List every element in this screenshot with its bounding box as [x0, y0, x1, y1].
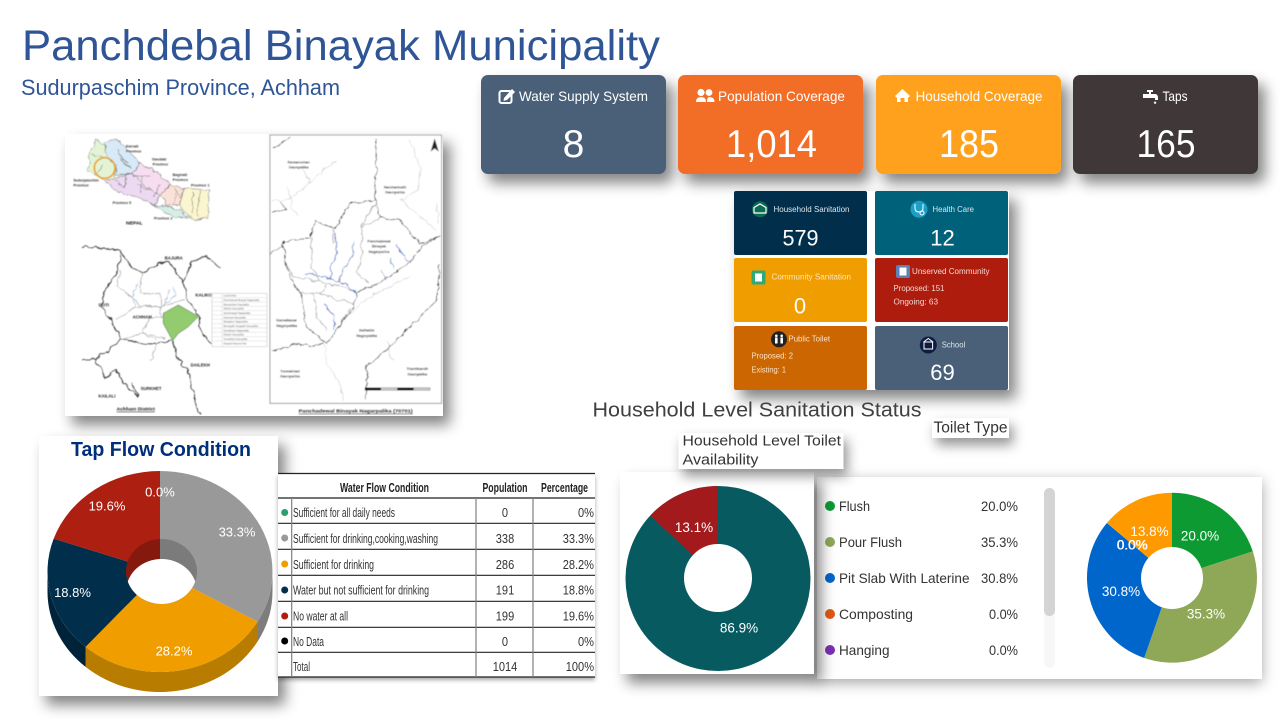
panel: location maps: Panchadewal Binayak Nagarpalika (70701) [299, 409, 413, 415]
chart: toilet type donut: 0.0% [1117, 538, 1147, 552]
panel: location maps: ACHHAM [133, 315, 152, 320]
icon: north arrow [431, 138, 439, 152]
panel: location maps: Thantikandh [406, 367, 428, 371]
icon: school [920, 336, 937, 354]
table: water flow condition: Population [482, 480, 528, 495]
legend: toilet types: 35.3% [981, 534, 1018, 550]
legend: toilet types: 30.8% [981, 570, 1018, 586]
panel: location maps: Province 5 [113, 201, 131, 205]
KPI card: population coverage [678, 75, 863, 174]
table: water flow condition: 28.2% [563, 557, 594, 572]
KPI card: population coverage: Population Coverage [718, 88, 845, 104]
panel: location maps: BAJURA [165, 255, 184, 260]
card: health care: 12 [930, 226, 955, 250]
panel: location maps: Karnali [126, 145, 138, 149]
table: water flow condition: 191 [496, 583, 514, 598]
panel: location maps: Province [73, 184, 89, 188]
legend: local bodies table: Local bodies [223, 296, 237, 298]
legend: local bodies table: Ramaroshan Gaunpalika [223, 303, 250, 306]
panel: location maps [65, 134, 443, 416]
panel: location maps: Nagarpalika [356, 334, 378, 338]
table: water flow condition: 33.3% [563, 531, 594, 546]
table: water flow condition: Total [293, 659, 310, 674]
chart: toilet type donut: 0.0% [1117, 538, 1148, 552]
table: water flow condition: Sufficient for drinking [293, 557, 374, 572]
chart: availability donut: 13.1% [675, 520, 713, 535]
chart: availability donut [626, 486, 810, 671]
legend: local bodies table: Kamalbazar Nagarpalika [223, 329, 250, 332]
map: municipality detail [270, 135, 442, 403]
KPI card: water supply system [481, 75, 666, 174]
legend: local bodies table: Khaptad National Park [223, 342, 247, 345]
card: unserved community: Ongoing: 63 [894, 298, 939, 307]
table: water flow condition: 0 [502, 634, 508, 649]
icon: clipboard [896, 265, 910, 278]
heading: tap flow condition: Tap Flow Condition [71, 439, 251, 461]
panel: location maps: NEPAL [126, 220, 143, 226]
table: water flow condition: No water at all [293, 608, 348, 624]
legend: toilet types: Flush [839, 498, 870, 514]
table: water flow condition: 286 [496, 557, 514, 572]
KPI card: water supply system: Water Supply System [519, 88, 648, 104]
card: school: School [942, 340, 965, 349]
table: water flow condition: 338 [496, 531, 514, 546]
legend dots [281, 509, 288, 644]
card: school [875, 326, 1008, 390]
panel: location maps: DOTI [99, 302, 109, 307]
icon: edit [500, 89, 515, 103]
panel: location maps: Province [173, 178, 188, 182]
panel: location maps: Province 1 [191, 184, 209, 188]
map: Nepal provinces [88, 140, 208, 219]
title: Panchdebal Binayak Municipality [22, 22, 660, 70]
subtitle: Sudurpaschim Province, Achham [21, 75, 340, 100]
panel: location maps: Narsharinath [384, 185, 406, 189]
legend: toilet types: 0.0% [989, 642, 1018, 658]
card: household sanitation: Household Sanitation [774, 205, 850, 214]
legend: local bodies table: Dhakari Gaunpalika [223, 334, 244, 337]
chart: 3D donut: 0.0% [145, 484, 175, 500]
legend: toilet types: 0.0% [989, 606, 1018, 622]
icon: faucet [1143, 90, 1158, 104]
table: water flow condition: 18.8% [563, 583, 594, 598]
legend: local bodies table: Sanphebagar Nagarpalika [223, 312, 251, 315]
card: public toilet: Proposed: 2 [752, 352, 794, 361]
card: community sanitation [734, 258, 867, 322]
KPI card: water supply system: 8 [563, 123, 584, 166]
KPI card: household coverage: Household Coverage [916, 88, 1043, 104]
chart: toilet type donut: 30.8% [1102, 584, 1140, 599]
panel: location maps: Binayak [372, 245, 387, 249]
table: water flow condition [278, 473, 595, 677]
card: health care [875, 191, 1008, 255]
KPI card: taps: Taps [1162, 88, 1188, 104]
chart: toilet type donut: 13.8% [1130, 524, 1169, 539]
panel: location maps: Province [153, 162, 168, 166]
card: unserved community: Proposed: 151 [894, 284, 945, 293]
legend: local bodies table: Panchadewal Binayak Nagarpalika [223, 299, 260, 302]
panel: location maps: Province [126, 149, 141, 153]
panel: location maps: Panchadewal [367, 239, 391, 243]
icon: stethoscope [910, 201, 928, 218]
table: water flow condition: 1014 [493, 659, 518, 674]
panel: location maps: DAILEKH [191, 363, 210, 368]
scale bar [365, 388, 430, 390]
panel: location maps: Nagarpalika [369, 250, 390, 254]
legend: local bodies table: Turmakhad Gaunpalika [223, 338, 248, 341]
panel: location maps: KALIKO [195, 293, 213, 298]
KPI card: taps [1073, 75, 1258, 174]
chart: 3D donut: 33.3% [219, 524, 256, 540]
legend: local bodies table: Chaurpati Gaunpalika [223, 316, 247, 319]
label: household level toilet availability: Availability [682, 451, 759, 468]
panel: location maps: Province 2 [154, 217, 172, 221]
icon: users [696, 89, 714, 102]
panel: household toilet availability [620, 472, 814, 674]
chart: 3D donut: 19.6% [89, 498, 126, 514]
panel: location maps: Gaunpalika [280, 375, 301, 379]
chart: 3D donut [47, 471, 272, 692]
legend: toilet types: Hanging [839, 642, 890, 658]
chart: toilet type donut: 20.0% [1181, 528, 1219, 544]
heading: household level sanitation status: Household Level Sanitation Status [592, 400, 922, 422]
KPI card: population coverage: 1,014 [726, 123, 817, 166]
table: water flow condition: Sufficient for drinking,cooking,washing [293, 531, 438, 546]
label: household level toilet availability [678, 433, 844, 469]
panel: location maps: KAILALI [98, 393, 115, 398]
card: school: 69 [930, 360, 955, 385]
scrollbar [1044, 488, 1055, 668]
card: household sanitation: 579 [782, 226, 818, 250]
panel: location maps: Turmakhad [280, 369, 300, 373]
panel: location maps: Sudurpaschim [73, 179, 99, 183]
legend: local bodies table: Mangalsen Nagarpalika [223, 321, 248, 324]
chart: 3D donut: 18.8% [54, 585, 91, 600]
legend: local bodies table [212, 293, 267, 347]
table: water flow condition: 0% [578, 634, 594, 649]
table: water flow condition: Water Flow Condition [340, 480, 429, 495]
chart: availability donut: 86.9% [720, 620, 758, 636]
map: Achham district [163, 305, 198, 341]
chart: 3D donut: 28.2% [156, 644, 193, 658]
panel: location maps: SURKHET [141, 386, 162, 391]
table: water flow condition: 0 [502, 505, 508, 520]
panel: location maps: Aathabis [359, 329, 374, 333]
label: household level toilet availability: Household Level Toilet [682, 433, 842, 450]
table: water flow condition: 19.6% [563, 609, 594, 624]
legend: toilet types: Pit Slab With Laterine [839, 570, 970, 586]
table: water flow condition: 199 [496, 609, 514, 624]
legend: local bodies table: Bannigadhi Jayagadh Gaunpalika [223, 326, 259, 328]
legend: local bodies table: Mellekh Gaunpalika [223, 309, 244, 311]
icon: home [895, 89, 910, 102]
label: toilet type: Toilet Type [934, 420, 1008, 436]
card: unserved community: Unserved Community [912, 267, 990, 276]
icon: house [752, 201, 768, 217]
panel: location maps: Gaunpalika [289, 166, 309, 170]
legend: toilet types: 20.0% [981, 498, 1018, 514]
card: household sanitation [734, 191, 867, 255]
card: community sanitation: 0 [794, 294, 806, 318]
icon: locator circle [94, 158, 115, 178]
card: health care: Health Care [932, 205, 975, 214]
panel: location maps: Gaunpalika [407, 372, 428, 376]
panel: location maps: Bagmati [173, 173, 187, 177]
table: water flow condition: 0% [578, 505, 594, 520]
icon: clipboard [752, 270, 766, 284]
card: community sanitation: Community Sanitation [772, 273, 851, 282]
table: water flow condition: Sufficient for all daily needs [293, 505, 395, 520]
panel: toilet type [817, 477, 1262, 679]
icon: restroom [771, 331, 787, 347]
legend: toilet types: Composting [839, 606, 913, 622]
legend: toilet types [825, 498, 1018, 658]
card: public toilet: Existing: 1 [752, 365, 787, 374]
KPI card: taps: 165 [1136, 123, 1196, 166]
panel: tap flow condition [39, 436, 278, 696]
panel: location maps: Kamalbazar [276, 319, 298, 323]
panel: sanitation cards [734, 191, 1009, 390]
table: water flow condition: 100% [566, 659, 594, 674]
card: public toilet: Public Toilet [788, 335, 831, 344]
card: public toilet [734, 326, 867, 390]
legend: toilet types: Pour Flush [839, 534, 902, 550]
panel: location maps: Gandaki [152, 157, 166, 161]
card: unserved community [875, 258, 1008, 322]
table: water flow condition: No Data [293, 634, 324, 649]
panel: location maps: Achham District [117, 407, 155, 413]
chart: toilet type donut: 35.3% [1187, 606, 1225, 622]
panel: location maps: Ramaroshan [288, 160, 310, 164]
chart: toilet type donut [1087, 493, 1257, 663]
panel: location maps: Nagarpalika [276, 324, 298, 328]
KPI card: household coverage: 185 [939, 123, 999, 166]
KPI card: household coverage [876, 75, 1061, 174]
table: water flow condition: Percentage [541, 480, 588, 495]
table: water flow condition: Water but not sufficient for drinking [293, 582, 429, 598]
panel: location maps: Gaunpalika [385, 191, 406, 195]
